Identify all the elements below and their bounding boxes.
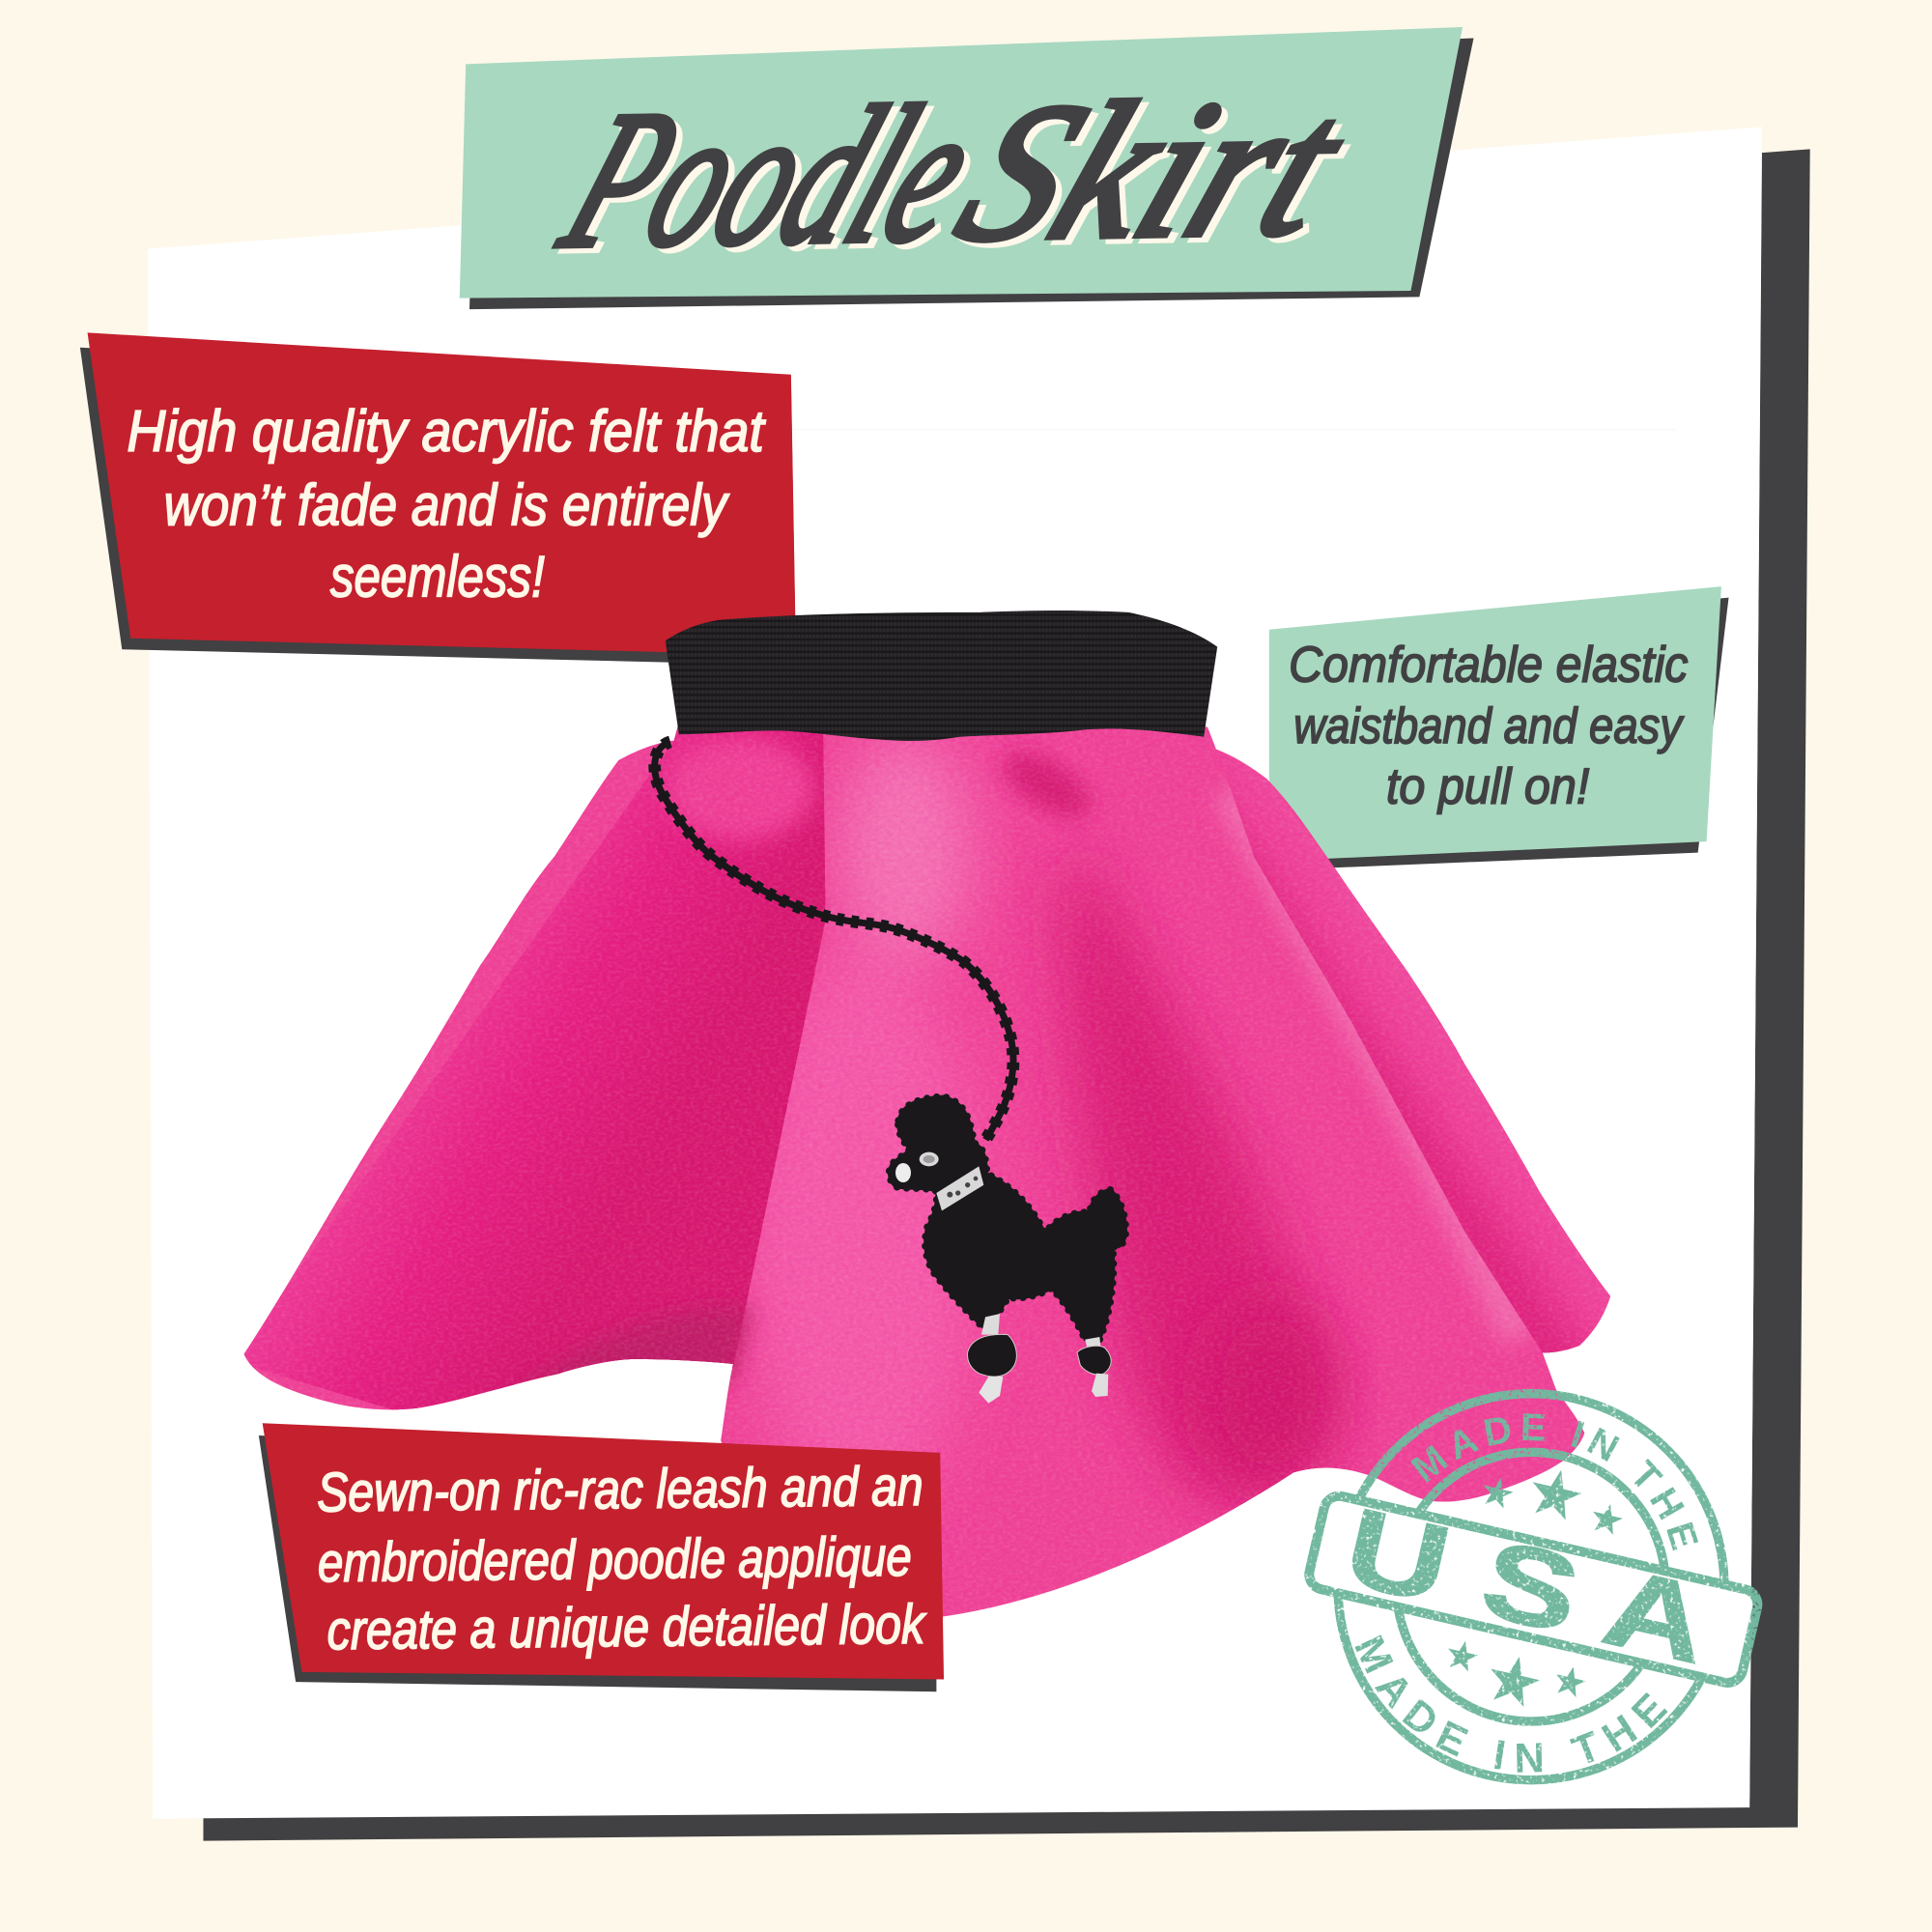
title banner (460, 27, 1474, 309)
stamp stars (1444, 1464, 1626, 1709)
callout: waistband: Comfortable elastic (1289, 637, 1688, 693)
waistband (666, 611, 1217, 741)
ric-rac leash (655, 742, 1013, 1140)
stamp: made in the USA: MADE IN THE (1354, 1634, 1667, 1773)
callout: felt quality: High quality acrylic felt that (127, 399, 766, 464)
callout: waistband: to pull on! (1386, 759, 1590, 815)
callout: felt quality: won’t fade and is entirely (164, 472, 729, 537)
title text: Poodle (538, 65, 1002, 289)
callout: felt quality (80, 332, 796, 666)
stamp: made in the USA (1304, 1389, 1762, 1785)
callout: waistband: waistband and easy (1293, 698, 1685, 754)
felt body (222, 715, 1627, 1638)
stamp arc text: MADE IN THE (1410, 1413, 1698, 1551)
title text: Skirt (933, 59, 1373, 282)
callout: waistband (1269, 586, 1729, 870)
white paper panel (148, 127, 1762, 1819)
title text: Poodle (544, 70, 1008, 294)
callout: ric-rac and applique: embroidered poodle applique (318, 1526, 912, 1594)
stamp USA banner: USA (1335, 1485, 1719, 1687)
stamp rings (1338, 1394, 1724, 1780)
poodle applique (889, 1096, 1125, 1404)
callout: ric-rac and applique: Sewn-on ric-rac leash and an (317, 1456, 923, 1523)
title text: Skirt (939, 64, 1379, 287)
paper shadow (203, 149, 1810, 1841)
callout: ric-rac and applique (259, 1423, 944, 1691)
callout: felt quality: seemless! (330, 544, 545, 609)
skirt (222, 611, 1627, 1638)
callout: ric-rac and applique: create a unique detailed look (327, 1594, 927, 1662)
